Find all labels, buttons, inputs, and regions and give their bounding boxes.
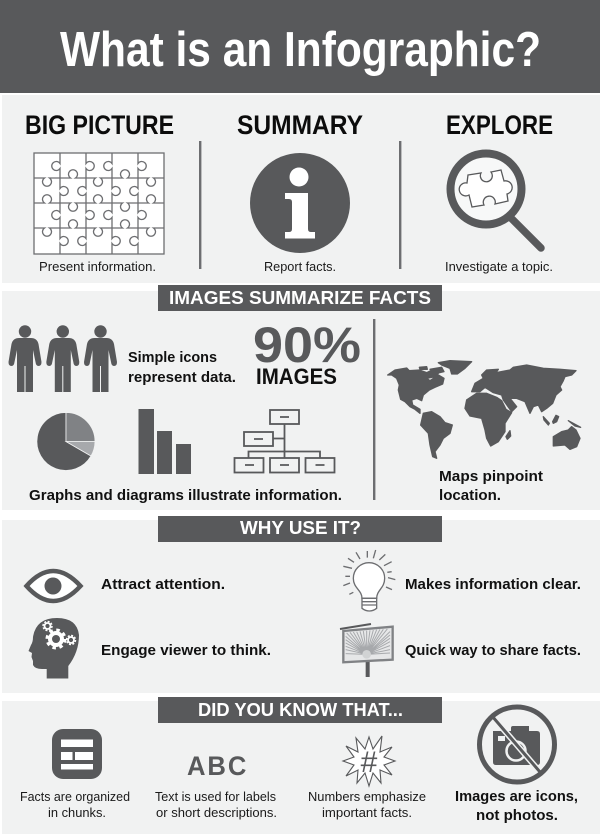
icon: billboard xyxy=(340,624,393,677)
caption: graphs and diagrams: Graphs and diagrams illustrate information. xyxy=(29,487,342,504)
bar chart xyxy=(138,409,191,474)
panel: why use it xyxy=(2,516,600,693)
icon: chunked text blocks xyxy=(52,729,102,779)
panel: did you know that xyxy=(2,697,600,834)
title: What is an Infographic? xyxy=(60,23,541,77)
section label: images summarize facts xyxy=(158,285,442,311)
section label: did you know that xyxy=(158,697,442,723)
heading: explore: EXPLORE xyxy=(446,110,553,140)
caption: report facts: Report facts. xyxy=(264,259,336,274)
text: simple icons represent data: represent data. xyxy=(128,369,236,386)
icon: head with gears xyxy=(28,618,79,678)
icon: ABC lettering: ABC xyxy=(187,750,248,781)
text: simple icons represent data: Simple icons xyxy=(128,349,217,366)
icon: starburst with number sign xyxy=(343,736,395,786)
caption: maps pinpoint location: location. xyxy=(439,487,501,504)
caption: text is used for labels: Text is used for labels xyxy=(155,789,276,804)
heading: big picture: BIG PICTURE xyxy=(25,110,174,140)
caption: investigate a topic: Investigate a topic. xyxy=(445,259,553,274)
header banner xyxy=(0,0,600,93)
caption: facts are organized xyxy=(20,789,130,820)
org chart diagram xyxy=(234,410,334,472)
icon: no camera symbol xyxy=(480,707,554,782)
stat: 90 percent images: 90% xyxy=(253,317,361,373)
icon: three people xyxy=(8,325,117,392)
text: simple icons represent data xyxy=(128,349,236,386)
pie chart xyxy=(37,412,95,470)
icon: information circle xyxy=(250,153,350,253)
icon: light bulb xyxy=(343,550,395,611)
caption: facts are organized: in chunks. xyxy=(48,805,106,820)
icon: starburst with number sign: # xyxy=(361,746,378,779)
text: makes information clear: Makes information clear. xyxy=(405,576,581,593)
caption: numbers emphasize: important facts. xyxy=(322,805,412,820)
caption: maps pinpoint location: Maps pinpoint xyxy=(439,468,543,485)
icon: eye xyxy=(26,571,80,601)
caption: text is used for labels: or short descriptions. xyxy=(156,805,277,820)
text: attract attention: Attract attention. xyxy=(101,576,225,593)
caption: numbers emphasize xyxy=(308,789,426,820)
caption: present information: Present information. xyxy=(39,259,156,274)
caption: images are icons xyxy=(455,788,578,824)
text: quick way to share facts: Quick way to share facts. xyxy=(405,642,581,659)
caption: text is used for labels xyxy=(155,789,277,820)
icon: magnifying glass with puzzle piece xyxy=(450,154,541,248)
section label: why use it xyxy=(158,516,442,542)
icon: jigsaw puzzle xyxy=(34,153,164,254)
text: engage viewer: Engage viewer to think. xyxy=(101,642,271,659)
caption: images are icons: not photos. xyxy=(476,807,558,824)
caption: numbers emphasize: Numbers emphasize xyxy=(308,789,426,804)
stat: 90 percent images: IMAGES xyxy=(256,364,337,389)
panel: images summarize facts xyxy=(2,285,600,510)
caption: images are icons: Images are icons, xyxy=(455,788,578,805)
section label: did you know that: DID YOU KNOW THAT... xyxy=(198,700,403,720)
section label: why use it: WHY USE IT? xyxy=(240,518,361,538)
heading: summary: SUMMARY xyxy=(237,110,363,140)
section label: images summarize facts: IMAGES SUMMARIZE FACTS xyxy=(169,288,431,308)
panel: overview xyxy=(2,95,600,283)
world map xyxy=(388,361,581,458)
caption: facts are organized: Facts are organized xyxy=(20,789,130,804)
caption: maps pinpoint location xyxy=(439,468,543,504)
